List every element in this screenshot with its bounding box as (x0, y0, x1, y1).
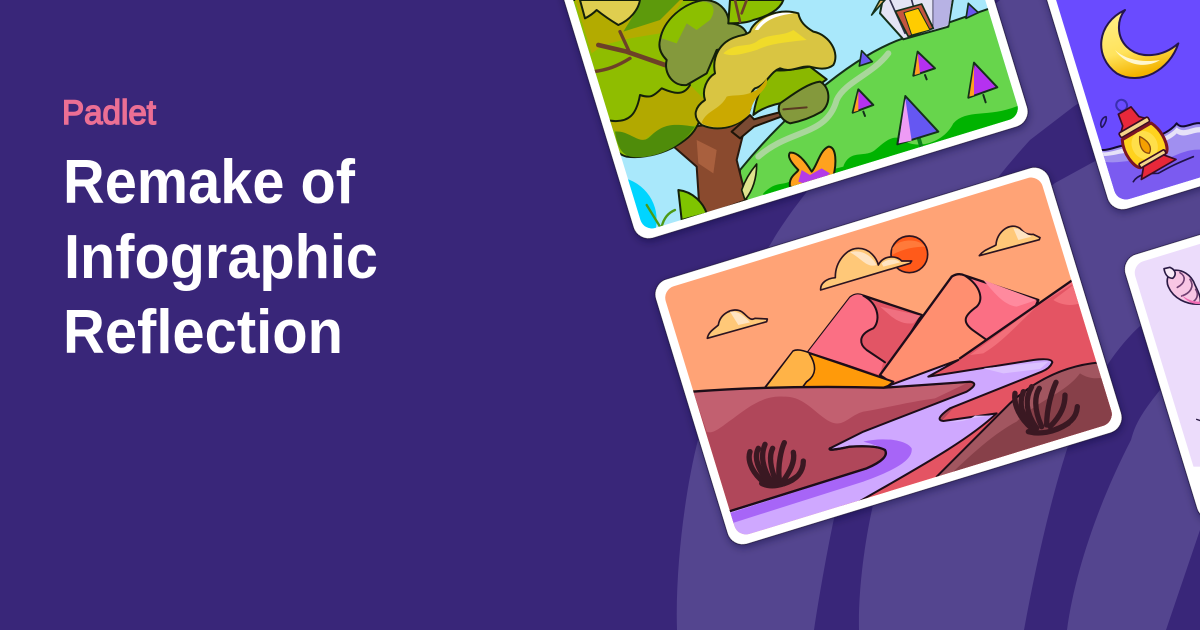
title: Remake of Infographic Reflection: Infographic (64, 223, 378, 292)
clouds (821, 248, 912, 290)
river (717, 359, 1052, 548)
lantern (1115, 98, 1177, 180)
shrub right (1015, 382, 1077, 433)
logo: Padlet: Padlet (62, 94, 157, 132)
card: tree and hill illustration (562, 0, 1033, 244)
brown hill (936, 362, 1112, 477)
right red hill (842, 281, 1112, 506)
title: Remake of Infographic Reflection: Remake of (63, 148, 355, 217)
seashell (1167, 270, 1200, 304)
title: Remake of Infographic Reflection (63, 148, 378, 367)
card: moon and lantern illustration (1042, 0, 1200, 216)
right peak (880, 274, 1038, 392)
background curved bands (677, 0, 1200, 630)
left foreground hill (690, 382, 975, 525)
title: Remake of Infographic Reflection: Reflection (63, 298, 343, 367)
sun (891, 236, 928, 273)
shrub left (749, 443, 803, 486)
left peak (808, 294, 922, 378)
card: desert mountains illustration (654, 166, 1125, 552)
card: shell illustration (1122, 233, 1200, 520)
small orange dune (765, 350, 893, 390)
moon crescent (1101, 10, 1178, 78)
